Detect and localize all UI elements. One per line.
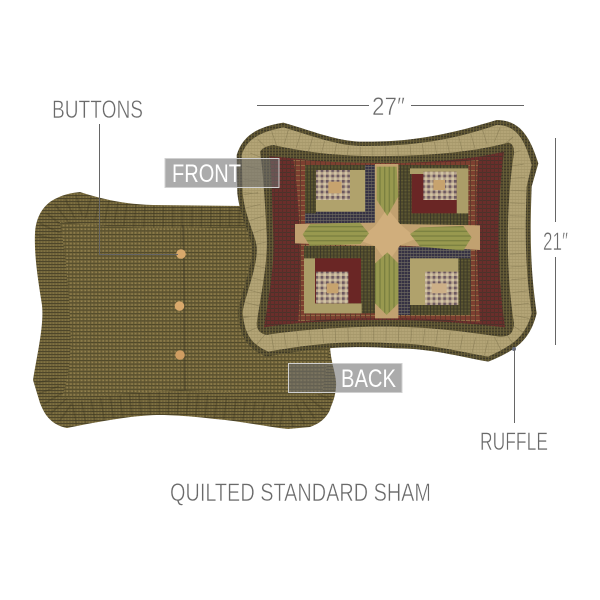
label: BUTTONS with leader <box>52 96 178 254</box>
red field <box>264 152 505 327</box>
label: RUFFLE with leader <box>480 347 548 456</box>
dimension: height 21 in: 21″ <box>543 228 568 256</box>
callout: BACK label <box>288 364 402 393</box>
ruffle: back sham <box>33 192 336 429</box>
main fabric: back sham <box>60 222 330 398</box>
panel: back of sham <box>33 192 336 429</box>
block: top left <box>305 165 376 223</box>
panel: front of sham <box>237 120 538 362</box>
ruffle edge <box>237 120 538 362</box>
tan pleated band <box>242 125 532 357</box>
callout: BACK label: BACK <box>341 365 396 393</box>
block: bottom left <box>304 246 375 313</box>
block: bottom right <box>398 247 471 315</box>
label: RUFFLE with leader: RUFFLE <box>480 428 548 456</box>
block: top right <box>398 165 468 225</box>
buttons <box>175 249 186 360</box>
dimension: width 27 in: 27″ <box>372 93 405 121</box>
callout: FRONT label: FRONT <box>172 160 241 188</box>
pleat lines <box>251 134 523 348</box>
dark border ring <box>257 143 514 337</box>
pleats: back ruffle <box>46 205 322 417</box>
inner plaid field <box>293 159 480 323</box>
placket seam <box>183 225 185 390</box>
centre cross star <box>295 164 480 318</box>
label: BUTTONS with leader: BUTTONS <box>52 96 143 124</box>
title: QUILTED STANDARD SHAM <box>170 479 431 507</box>
